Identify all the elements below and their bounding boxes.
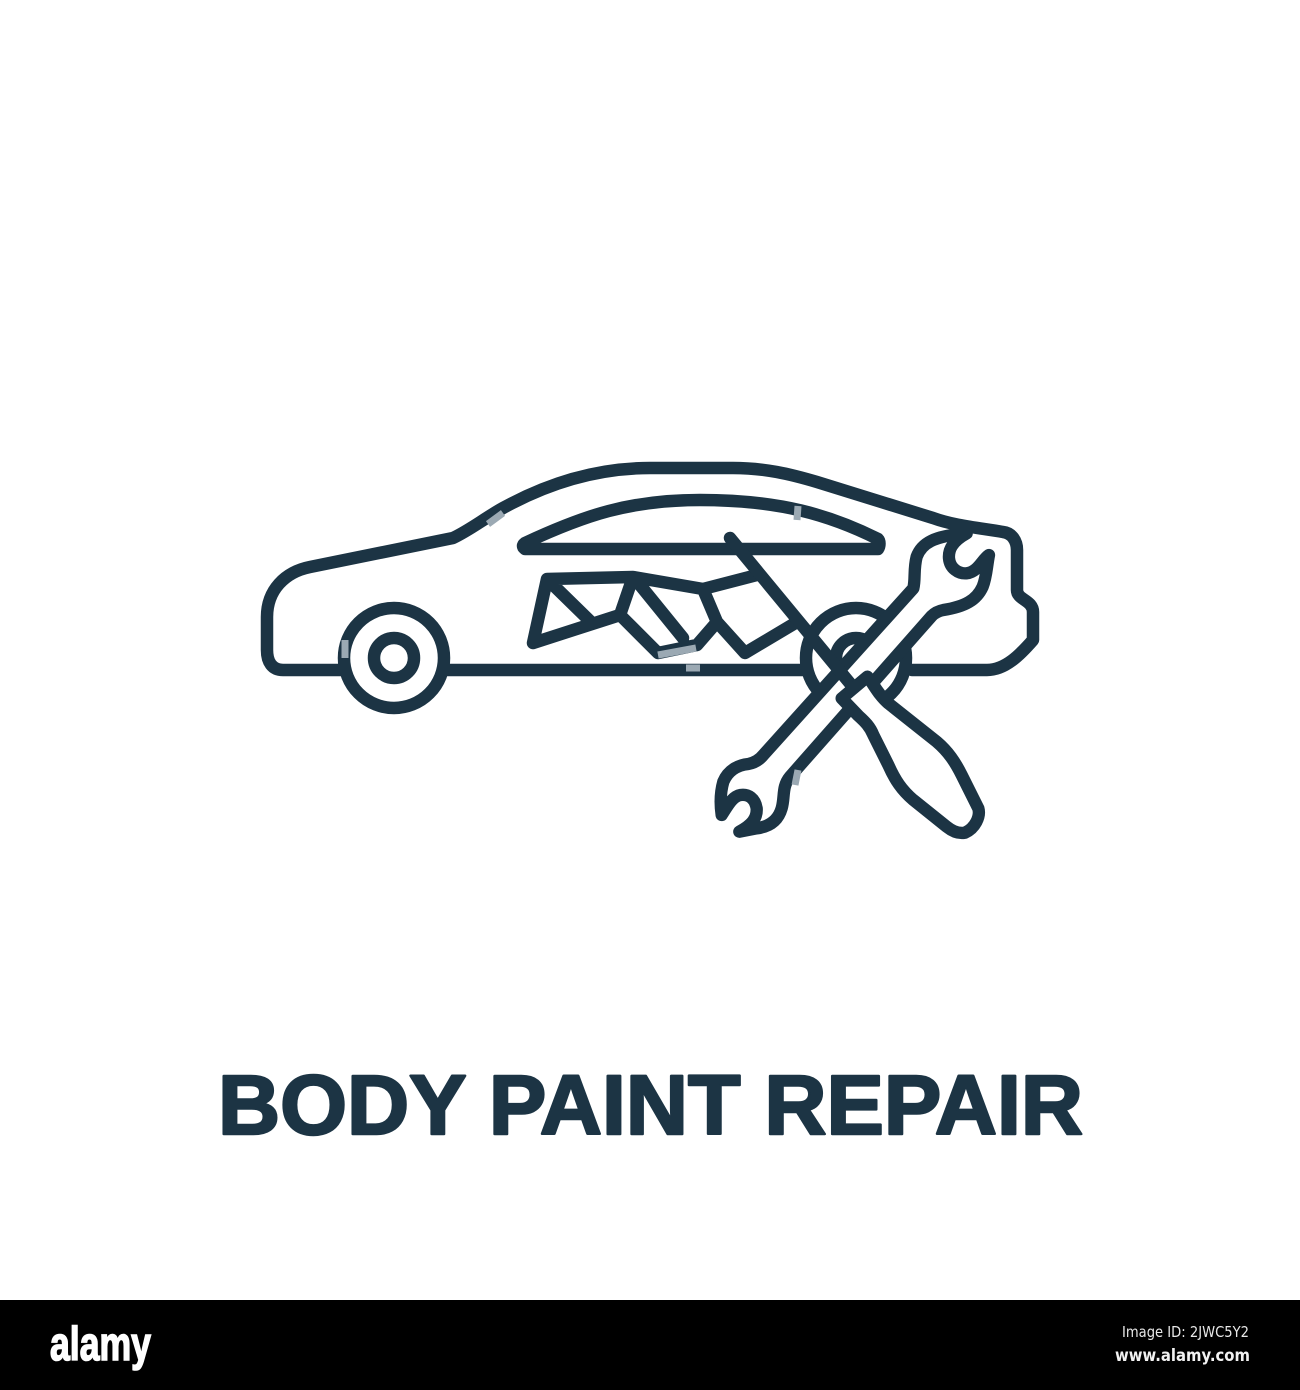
side window [523,500,880,549]
wrench [721,533,989,832]
icon: car with scratched door and crossed tools [267,468,1033,833]
screwdriver [842,677,979,833]
image id: Image ID: 2JWC5Y2 [1122,1323,1249,1341]
stock watermark fragments [345,506,798,785]
rear wheel [806,608,906,708]
footer band [0,1300,1300,1390]
car body outline [267,468,1033,670]
website: www.alamy.com [1115,1346,1250,1366]
door paint damage [533,575,797,653]
title: BODY PAINT REPAIR [218,1058,1083,1152]
alamy logo: alamy [50,1317,151,1370]
damage scrape line [730,538,853,687]
front wheel [344,608,444,708]
